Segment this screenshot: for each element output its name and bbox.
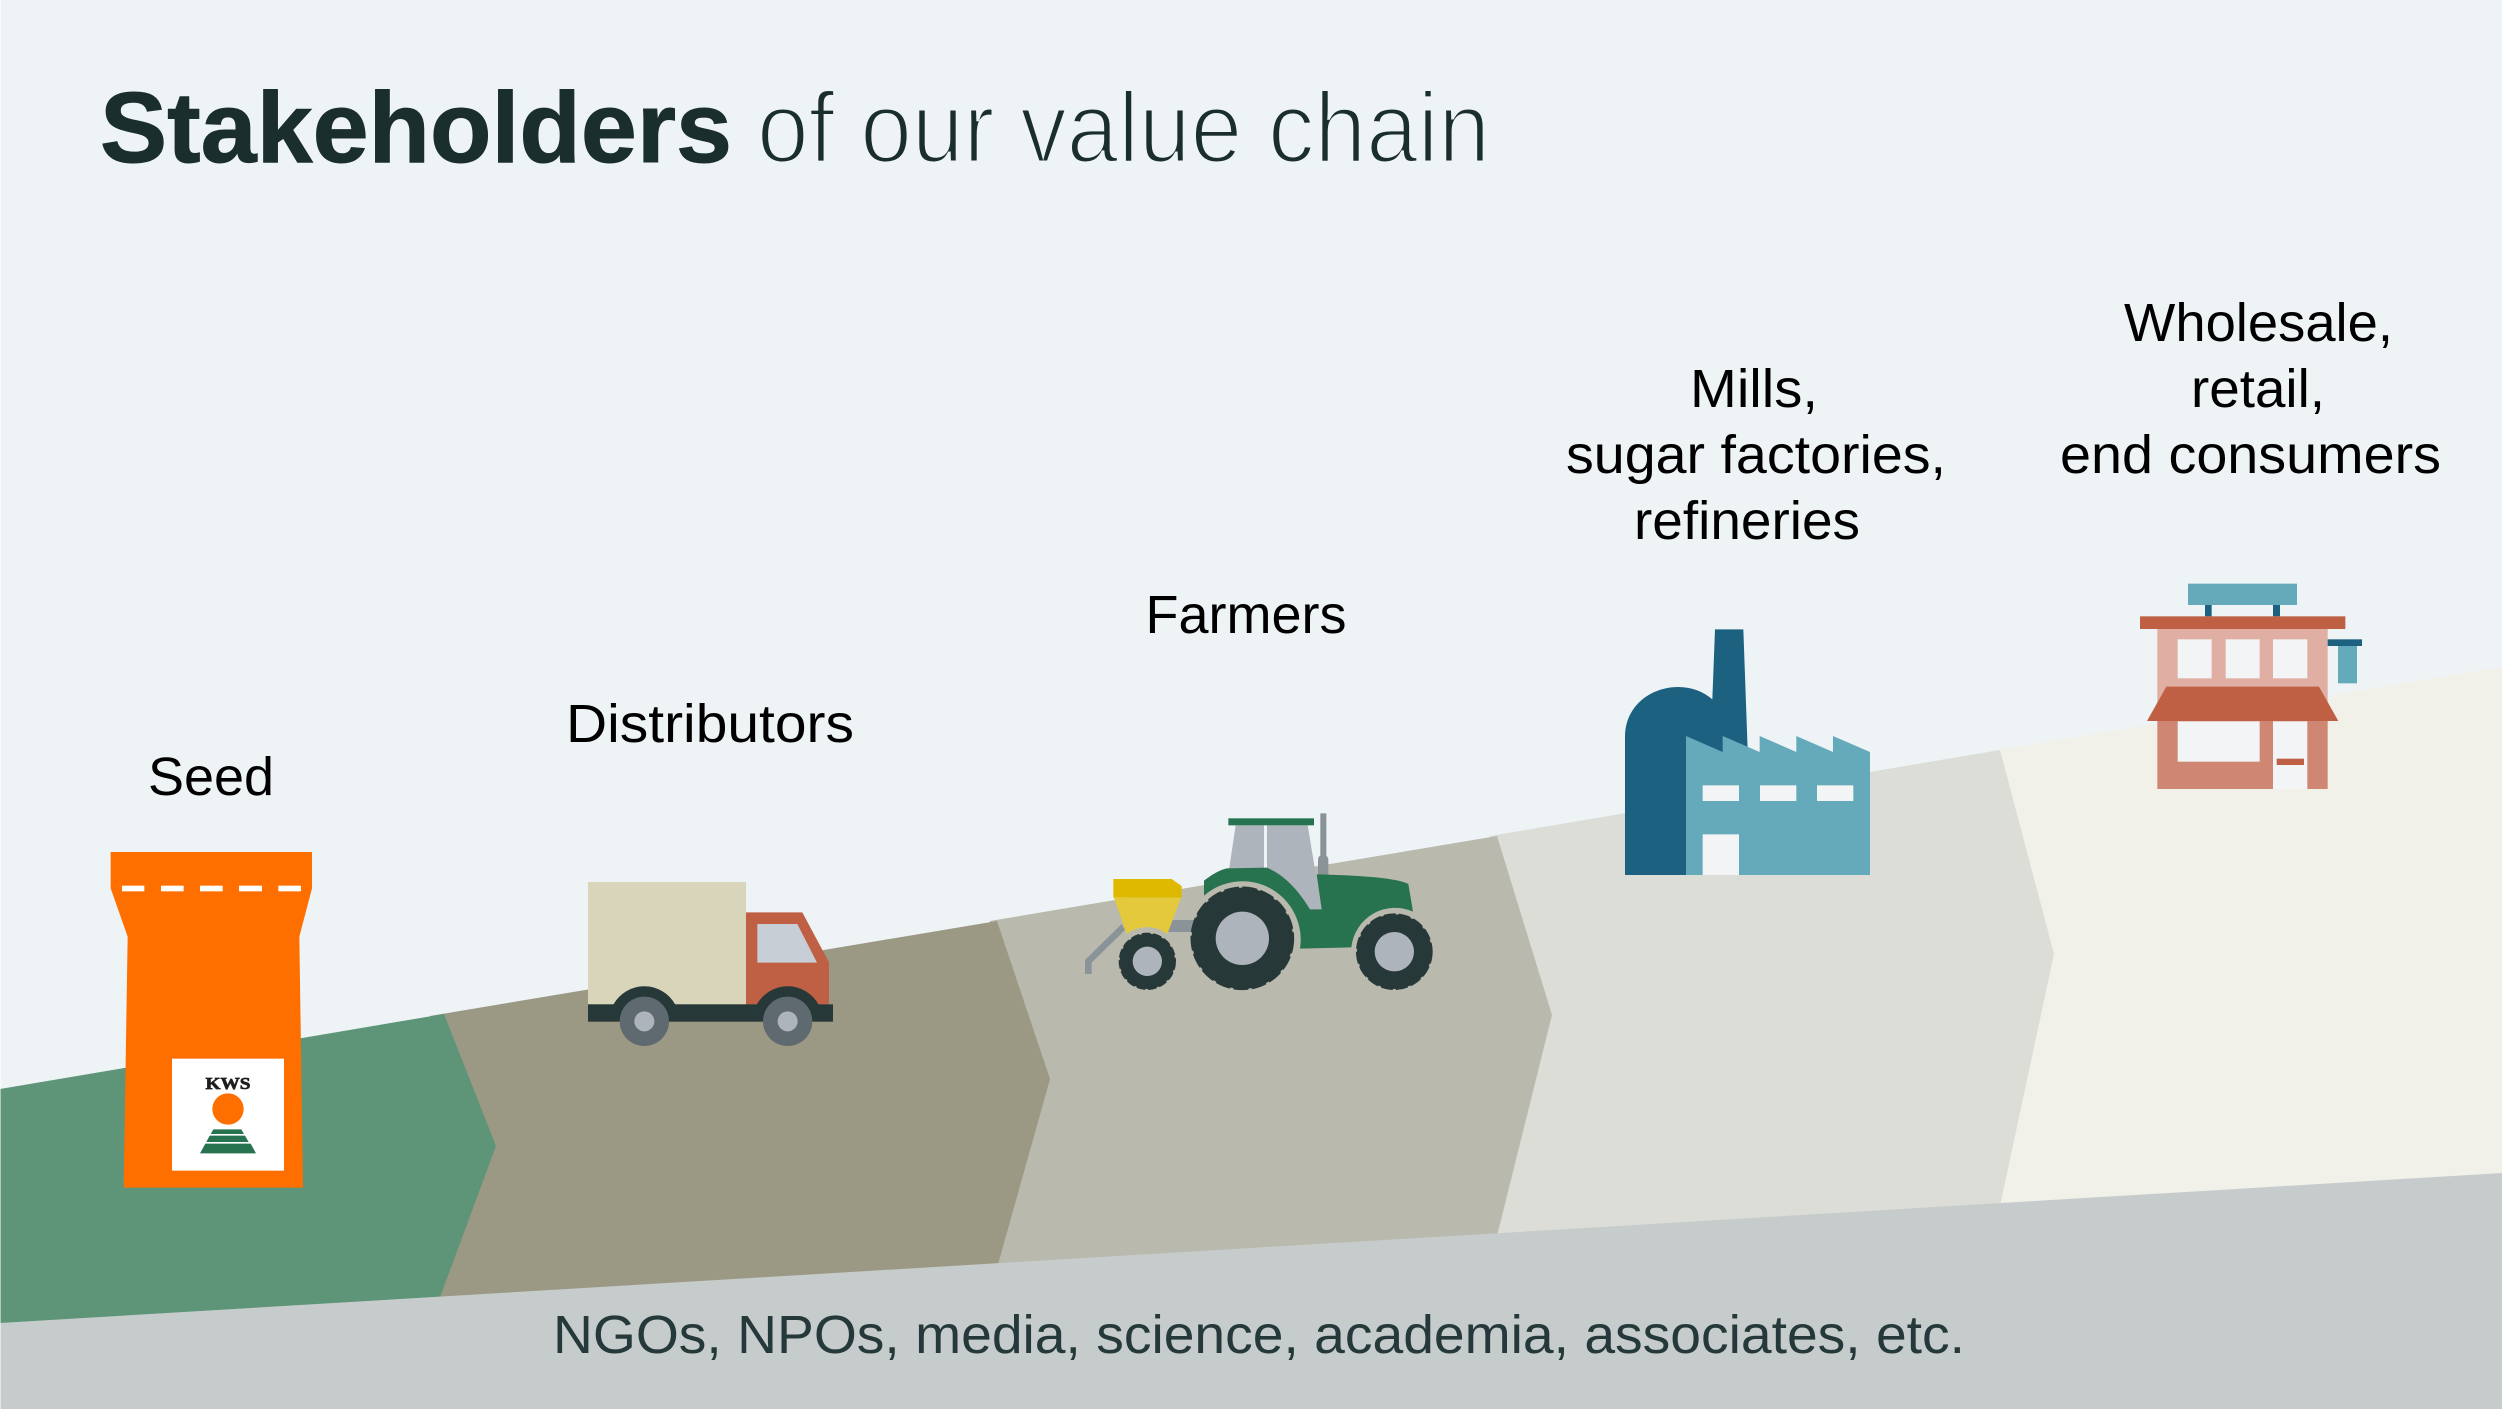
label: mills [1566, 359, 1946, 551]
band: seed [0, 1014, 496, 1326]
label: mills: refineries [1634, 491, 1860, 551]
band: mills [1490, 750, 2054, 1236]
title: of our value chain [757, 72, 1490, 184]
band: wholesale [1990, 667, 2502, 1210]
icon: seed bag [111, 852, 312, 1188]
icon: seed bag: KWS [205, 1074, 250, 1093]
label: distributors: Distributors [566, 694, 854, 754]
label: seed: Seed [148, 747, 274, 807]
icon: shop [2140, 584, 2362, 789]
icon: factory [1625, 629, 1870, 875]
band: farmers [990, 836, 1552, 1270]
title [100, 72, 1490, 184]
label: other stakeholders: NGOs, NPOs, media, science, academia, associates, etc. [553, 1305, 1965, 1365]
label: mills: sugar factories, [1566, 425, 1946, 485]
label: wholesale: Wholesale, [2124, 293, 2393, 353]
label: wholesale [2060, 293, 2441, 485]
band: distributors [430, 921, 1050, 1300]
icon: tractor [1085, 813, 1432, 989]
title: Stakeholders [100, 72, 732, 184]
value chain bands [0, 667, 2502, 1409]
label: wholesale: end consumers [2060, 425, 2441, 485]
band: other stakeholders [0, 1173, 2502, 1409]
icon: truck [588, 882, 833, 1046]
label: mills: Mills, [1690, 359, 1818, 419]
label: farmers: Farmers [1146, 585, 1346, 645]
label: wholesale: retail, [2191, 359, 2325, 419]
